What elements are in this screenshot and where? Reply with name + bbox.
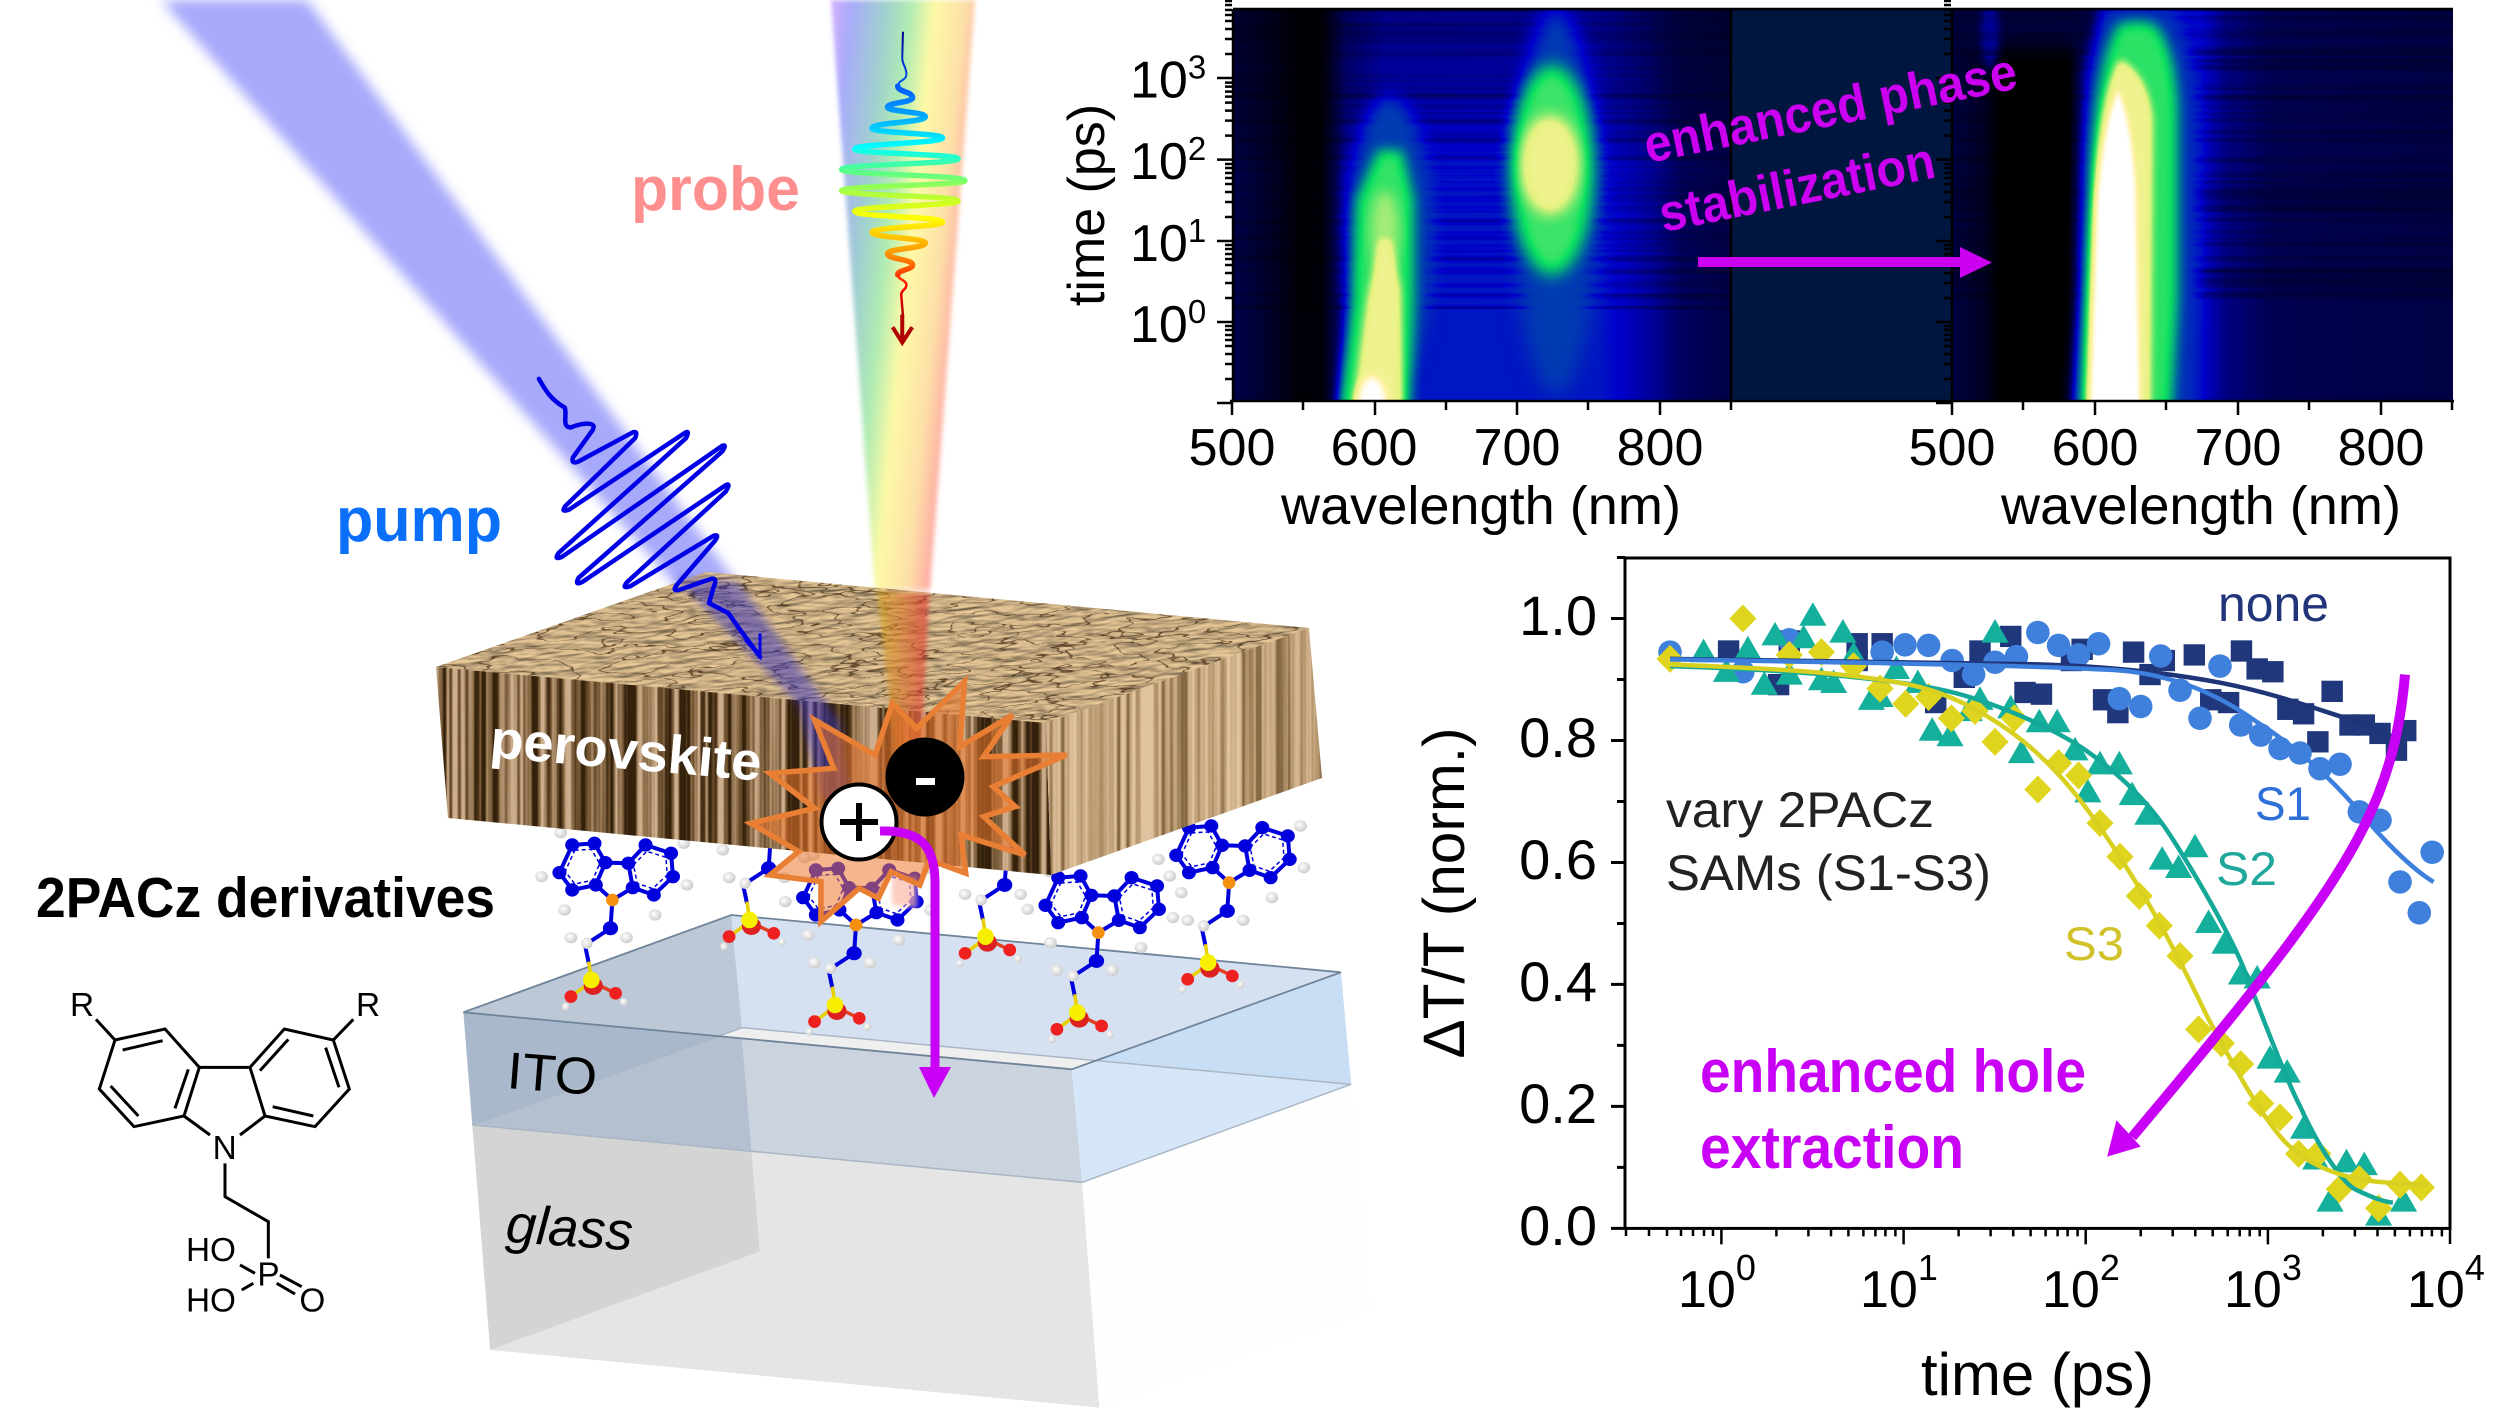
heatmap x tick labels: 600 (2052, 419, 2138, 477)
y tick labels: 0.0 (1519, 1194, 1597, 1257)
perovskite top face (436, 572, 1308, 723)
fit curve: none (1670, 659, 2404, 745)
heatmap x tick labels: 800 (2338, 419, 2424, 477)
x tick labels: 10 (2042, 1261, 2100, 1319)
x tick labels: 0 (1736, 1247, 1756, 1288)
panel: transient absorption heatmaps (1058, 0, 2465, 536)
label: ITO: ITO (505, 1042, 599, 1107)
y-axis label: ΔT/T (norm.) (1412, 728, 1477, 1058)
heatmap x tick labels: 700 (1474, 419, 1560, 477)
data series: S3 diamonds (1656, 604, 2435, 1222)
heatmap x tick labels: 800 (1617, 419, 1703, 477)
probe beam tail below perovskite (892, 875, 917, 908)
heatmap y tick labels: 2 (1188, 130, 1206, 167)
arrow: phase stabilization (1698, 247, 1992, 278)
heatmap x tick labels: 600 (1331, 419, 1417, 477)
heatmap x tick labels: 500 (1189, 419, 1275, 477)
heatmap y tick labels: 10 (1130, 215, 1188, 273)
heatmap: spacer band (1731, 9, 1952, 400)
molecule 3 (779, 852, 937, 1036)
heatmap y tick labels: 3 (1188, 48, 1206, 86)
heatmap x tick labels: 500 (1909, 419, 1995, 477)
icon: electron (886, 738, 964, 816)
y tick labels: 0.8 (1519, 706, 1597, 769)
heatmap x tick labels (1189, 419, 2424, 477)
label: S3: S3 (2064, 917, 2124, 970)
label: S1: S1 (2255, 777, 2311, 830)
data series: none squares (1718, 626, 2416, 761)
chemical structure: 2PACz: R (356, 987, 380, 1024)
y tick labels: 0.2 (1519, 1072, 1597, 1135)
annotation: enhanced phase stabilization: stabilization (1654, 132, 1940, 244)
molecule 1 (535, 827, 693, 1011)
arrow: hole extraction into ITO (880, 831, 951, 1098)
chemical structure: 2PACz: R (70, 987, 94, 1024)
molecule 2 (693, 767, 852, 951)
x tick labels: 10 (2407, 1261, 2465, 1319)
label: S2: S2 (2216, 842, 2277, 895)
chemical structure: 2PACz: O (299, 1283, 325, 1320)
heatmap: with SAM (right) (1940, 0, 2465, 410)
heatmap y tick labels (1130, 48, 1206, 354)
heatmap: none (left) (1234, 10, 1730, 400)
y tick labels: 1.0 (1519, 584, 1597, 647)
x tick labels: 10 (2224, 1261, 2282, 1319)
x tick labels: 10 (1860, 1261, 1918, 1319)
annotation: enhanced hole extraction: extraction (1700, 1114, 1964, 1181)
chemical structure: 2PACz: HO (186, 1232, 236, 1269)
fit curve: S1 (1670, 659, 2434, 882)
x tick labels (1678, 1247, 2485, 1319)
SAM molecules (535, 767, 1310, 1043)
perovskite slab (413, 567, 1337, 880)
label: none: none (2218, 576, 2329, 632)
annotation: enhanced hole extraction (1700, 1038, 2086, 1181)
data series: S1 circles (1658, 621, 2444, 925)
heatmap y tick labels: 10 (1130, 133, 1188, 191)
perovskite right face (1040, 620, 1330, 880)
annotation: enhanced phase stabilization: enhanced phase (1639, 43, 2022, 175)
y tick labels: 0.6 (1519, 828, 1597, 891)
probe laser beam (831, 0, 975, 590)
heading: 2PACz derivatives: 2PACz derivatives (36, 866, 495, 930)
y tick labels: 0.4 (1519, 950, 1597, 1013)
heatmap x-axis label right: wavelength (nm) (2000, 476, 2401, 536)
pump laser beam (161, 0, 738, 590)
pump beam inside perovskite (674, 576, 850, 800)
heatmap y tick labels: 1 (1188, 212, 1206, 249)
data and fits (1656, 602, 2444, 1226)
ITO layer (463, 915, 1351, 1182)
x-axis label: time (ps) (1921, 1341, 2154, 1408)
icon: orange burst (751, 682, 1067, 922)
label: perovskite: perovskite (488, 709, 764, 793)
x tick labels: 3 (2282, 1247, 2302, 1288)
heatmap axes (1217, 1, 2454, 415)
annotation: enhanced hole extraction: enhanced hole (1700, 1038, 2086, 1105)
arrow: enhanced hole extraction (2107, 675, 2405, 1157)
chemical structure: 2PACz: HO (186, 1283, 236, 1320)
panel: decay kinetics plot (1412, 558, 2485, 1408)
heatmap y tick labels: 10 (1130, 296, 1188, 354)
glass substrate (472, 1084, 1370, 1408)
y tick labels (1519, 584, 1597, 1257)
icon: probe rainbow pulse (842, 33, 965, 343)
annotation: vary 2PACz SAMs (1666, 782, 1991, 901)
heatmap x tick labels: 700 (2195, 419, 2281, 477)
annotation: enhanced phase stabilization (1639, 43, 2022, 244)
molecule 6 (1152, 810, 1310, 993)
panel: device stack and pump-probe schematic (161, 0, 1370, 1408)
label: pump: pump (336, 486, 502, 555)
chemical structure: 2PACz: N (213, 1130, 237, 1167)
heatmap y tick labels: 10 (1130, 52, 1188, 110)
x tick labels: 10 (1678, 1261, 1736, 1319)
icon: hole (822, 784, 896, 860)
molecule 4 (929, 784, 1088, 967)
heatmap y tick labels: 0 (1188, 293, 1206, 330)
chemical structure: 2PACz: P (257, 1257, 280, 1294)
label: glass: glass (504, 1194, 635, 1262)
x tick labels: 4 (2465, 1247, 2485, 1288)
pump pulse wave (539, 379, 760, 657)
annotation: vary 2PACz SAMs: SAMs (S1-S3) (1666, 845, 1991, 901)
fit curve: S2 (1670, 666, 2393, 1203)
fit curve: S3 (1670, 664, 2429, 1185)
perovskite front face (430, 660, 1060, 880)
label: probe: probe (631, 155, 800, 224)
x tick labels: 1 (1918, 1247, 1938, 1288)
probe beam inside perovskite (877, 590, 929, 800)
x tick labels: 2 (2100, 1247, 2120, 1288)
heatmap y-axis label: time (ps) (1058, 104, 1116, 306)
molecule 5 (1021, 860, 1179, 1043)
chemical structure: 2PACz (70, 987, 380, 1320)
plot frame and ticks (1611, 558, 2450, 1244)
data series: S2 triangles (1690, 602, 2417, 1226)
heatmap x-axis label left: wavelength (nm) (1280, 476, 1681, 536)
annotation: vary 2PACz SAMs: vary 2PACz (1666, 782, 1934, 838)
